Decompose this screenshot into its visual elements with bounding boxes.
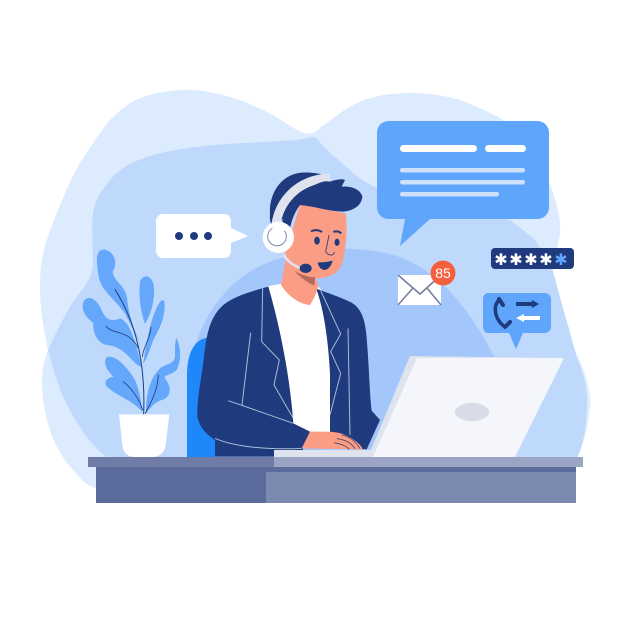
- password field: [491, 248, 574, 269]
- phone handset: [495, 299, 510, 327]
- plant pot: [119, 414, 169, 457]
- transfer arrows: [516, 300, 539, 308]
- neck: [281, 253, 318, 305]
- plant leaves: [83, 250, 180, 413]
- front hair: [282, 179, 362, 228]
- desk: [88, 457, 583, 503]
- icon: potted plant: [83, 250, 180, 457]
- laptop: [274, 356, 564, 457]
- icon: envelope with notification badge: [398, 260, 456, 305]
- background blobs: [40, 90, 590, 488]
- speech bubble: typing dots: [156, 214, 248, 258]
- plant stems: [106, 289, 158, 414]
- headset: [263, 222, 312, 273]
- headset band: [276, 178, 330, 226]
- icon: phone call bubble: [483, 293, 551, 349]
- password field: ✱: [539, 250, 553, 269]
- person: support agent: [197, 173, 380, 457]
- password field: ✱: [494, 250, 508, 269]
- head: [263, 173, 362, 305]
- facial features: [311, 230, 341, 270]
- icon: envelope with notification badge: 85: [435, 265, 451, 281]
- password field: ✱: [524, 250, 538, 269]
- speech bubble: large message: [377, 121, 549, 246]
- jacket: [197, 287, 380, 457]
- face: [285, 205, 347, 278]
- chair back: [187, 338, 215, 458]
- back hair: [270, 173, 327, 227]
- hand: [302, 432, 363, 449]
- t-shirt: [268, 283, 330, 447]
- password field: ✱: [509, 250, 523, 269]
- password field: ✱: [554, 250, 568, 269]
